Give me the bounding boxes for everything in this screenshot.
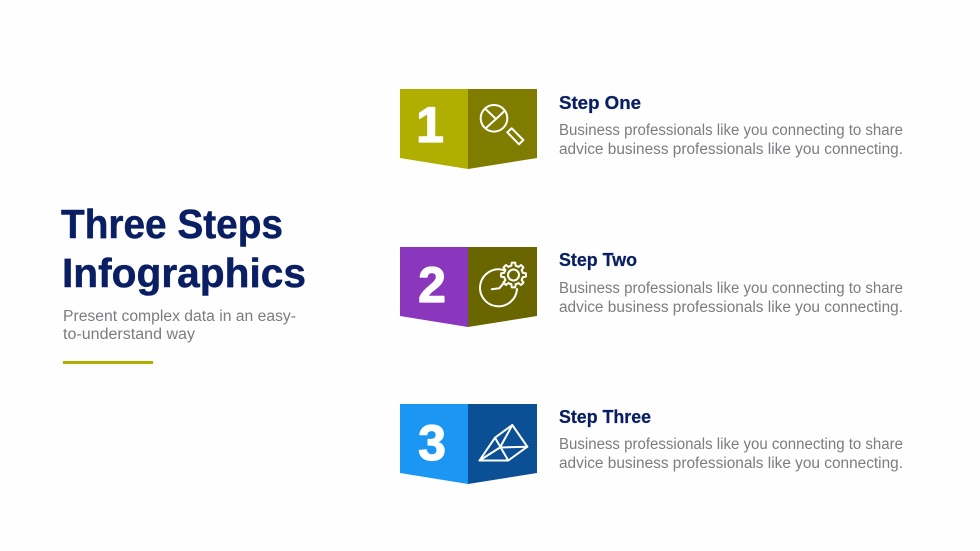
number 1: 1: [416, 97, 444, 153]
step 2 text: [559, 250, 903, 316]
step 1 text: Step One: [559, 93, 641, 113]
step 3 text: Step Three: [559, 407, 651, 427]
title: Infographics: [62, 250, 306, 296]
icon: clock with gear: [480, 263, 526, 306]
step 1 text: Business professionals like you connecting to share: [559, 122, 903, 139]
number 3: 3: [418, 415, 446, 471]
step 2 badge: [400, 247, 537, 327]
subtitle: to-understand way: [63, 326, 195, 343]
icon: magnifier with pie chart: [481, 105, 523, 144]
step 1 badge: [400, 89, 537, 169]
step 3 text: advice business professionals like you connecting.: [559, 455, 903, 472]
step 2 text: Business professionals like you connecting to share: [559, 280, 903, 297]
subtitle: [63, 308, 296, 343]
step 3 text: [559, 407, 903, 472]
step 2 text: Step Two: [559, 250, 637, 270]
title: [61, 201, 306, 296]
step 3 text: Business professionals like you connecting to share: [559, 436, 903, 453]
step 1 text: advice business professionals like you connecting.: [559, 141, 903, 158]
title: Three Steps: [61, 201, 283, 247]
subtitle: Present complex data in an easy-: [63, 308, 296, 325]
step 2 text: advice business professionals like you connecting.: [559, 299, 903, 316]
number 2: 2: [418, 257, 446, 313]
icon: prism: [480, 425, 527, 460]
accent underline: [63, 361, 153, 364]
step 1 text: [559, 93, 903, 158]
step 3 badge: [400, 404, 537, 484]
